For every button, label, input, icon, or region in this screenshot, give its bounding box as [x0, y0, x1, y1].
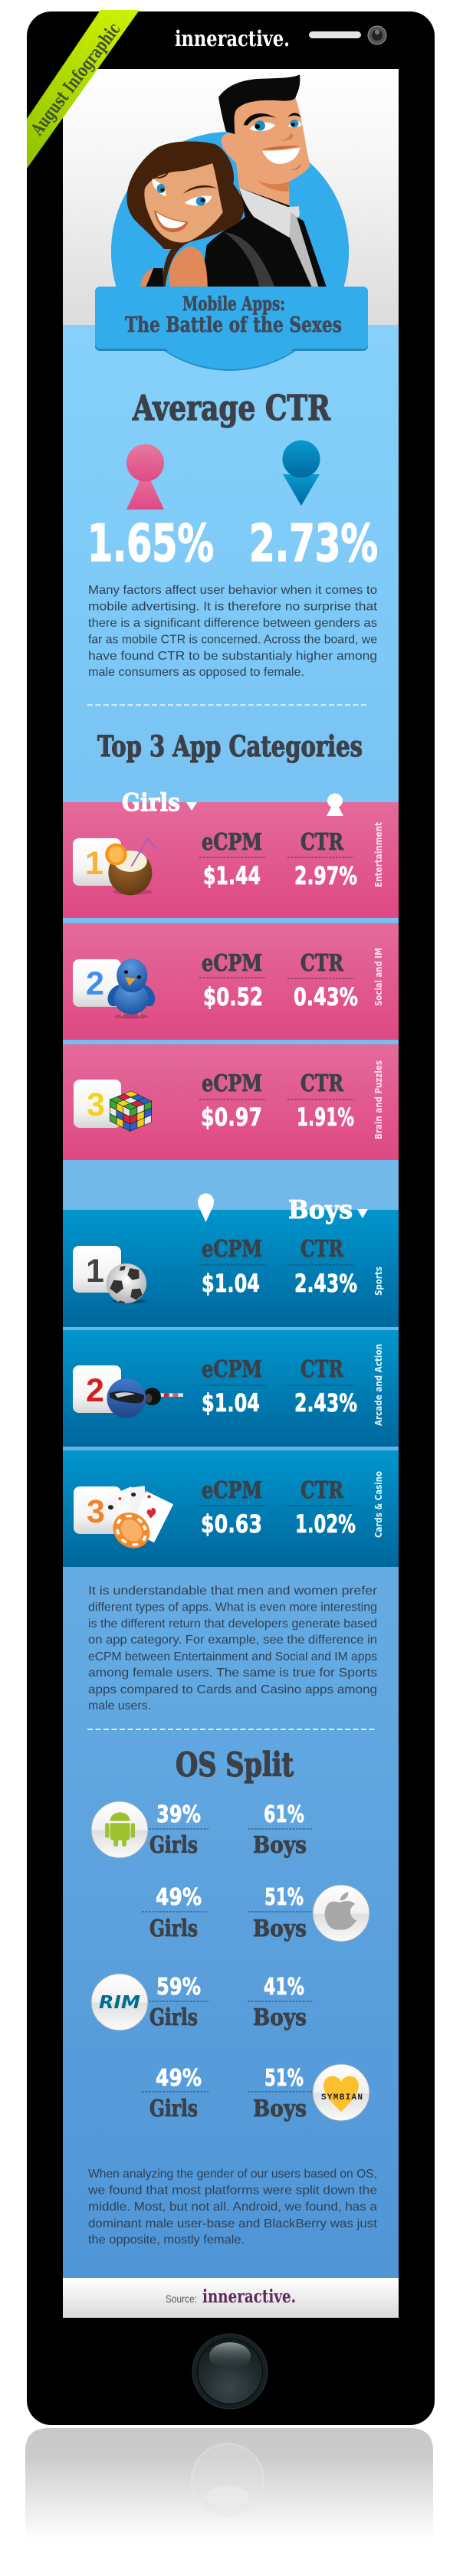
- paragraph: OS explanation: When analyzing the gender of our users based on OS,: [88, 2168, 377, 2181]
- column labels: eCPM: [202, 829, 262, 856]
- icon: puzzle cube: [110, 1091, 152, 1131]
- column labels: [202, 950, 344, 977]
- rank tile 3: 3: [87, 1086, 105, 1123]
- paragraph: app categories explanation: on app category. For example, see the difference in: [88, 1634, 377, 1647]
- icon: RIM badge: RIM: [99, 1993, 140, 2013]
- Apple stats: 49%: [156, 1884, 202, 1911]
- RIM stats: [142, 1974, 314, 2031]
- Apple stats: Girls: [149, 1916, 198, 1942]
- values: [202, 1388, 357, 1417]
- heading: Average CTR: Average CTR: [132, 388, 330, 428]
- banner title line 1: Mobile Apps:: [182, 293, 285, 315]
- heading: OS Split: OS Split: [176, 1746, 294, 1785]
- icon: racing helmet: [107, 1378, 183, 1418]
- RIM stats: 59%: [156, 1974, 201, 2001]
- column labels: [202, 1070, 344, 1097]
- icon: small male figure: [198, 1194, 214, 1222]
- rank tile 3: [74, 1080, 121, 1128]
- paragraph: app categories explanation: eCPM between Entertainment and Social and IM apps: [88, 1650, 377, 1663]
- paragraph: app categories explanation: different types of apps. What is even more interesting: [88, 1601, 377, 1614]
- phone speaker: [309, 31, 361, 38]
- footer: source: [63, 2278, 399, 2318]
- paragraph: CTR explanation: Many factors affect user behavior when it comes to: [88, 584, 377, 597]
- hero illustration: couple: [111, 74, 349, 371]
- paragraph: app categories explanation: [88, 1585, 378, 1712]
- Apple stats: Boys: [253, 1916, 307, 1942]
- icon: small female figure: [327, 794, 343, 816]
- Symbian stats: Girls: [149, 2096, 198, 2122]
- paragraph: CTR explanation: far as mobile CTR is concerned. Across the board, we: [88, 633, 377, 647]
- rank tile 2: [73, 1365, 121, 1413]
- rank tile 2: 2: [86, 965, 104, 1002]
- OS row: Apple: [142, 1884, 369, 1942]
- paragraph: app categories explanation: is the different return that developers generate based: [88, 1617, 377, 1630]
- RIM stats: Boys: [253, 2004, 307, 2031]
- banner title line 2: The Battle of the Sexes: [125, 313, 342, 337]
- panel: girls category 2: [63, 923, 399, 1040]
- column labels: CTR: [300, 950, 344, 977]
- column labels: [202, 1356, 344, 1383]
- panel: boys category 2: [63, 1330, 399, 1447]
- label: Girls: Girls: [122, 788, 180, 817]
- category label: Social and IM: [373, 948, 384, 1006]
- rank tile 3: [74, 1486, 121, 1534]
- category label: Cards & Casino: [373, 1471, 384, 1538]
- RIM stats: Girls: [149, 2004, 198, 2031]
- paragraph: CTR explanation: [88, 584, 378, 679]
- paragraph: OS explanation: [87, 2168, 378, 2247]
- icon: female figure: [126, 444, 164, 510]
- icon: playing cards and chip: [106, 1486, 173, 1553]
- Symbian stats: 51%: [264, 2065, 304, 2092]
- paragraph: CTR explanation: male consumers as opposed to female.: [88, 666, 304, 679]
- values: 0.43%: [294, 982, 358, 1011]
- icon: male figure: [282, 440, 320, 506]
- Android stats: Boys: [253, 1832, 307, 1859]
- column labels: CTR: [300, 1356, 344, 1383]
- phone home button: [192, 2334, 268, 2409]
- paragraph: OS explanation: dominant male user-base and BlackBerry was just: [88, 2217, 378, 2230]
- Symbian stats: 49%: [156, 2065, 202, 2092]
- values: 2.43%: [294, 1269, 357, 1298]
- paragraph: OS explanation: middle. Most, but not all. Android, we found, has a: [88, 2201, 377, 2214]
- stat: male CTR: 2.73%: [249, 513, 378, 573]
- phone reflection: [25, 2428, 433, 2540]
- values: $1.04: [202, 1388, 260, 1417]
- values: [202, 1269, 357, 1298]
- column labels: eCPM: [202, 1070, 262, 1097]
- RIM stats: 41%: [264, 1974, 304, 2001]
- OS row: RIM: [91, 1974, 314, 2031]
- column labels: [202, 829, 344, 856]
- rank tile 1: [73, 838, 121, 886]
- Android stats: 39%: [156, 1801, 201, 1828]
- paragraph: app categories explanation: It is understandable that men and women prefer: [88, 1585, 378, 1598]
- phone camera: [368, 26, 386, 44]
- column labels: CTR: [300, 829, 344, 856]
- title banner: [95, 287, 368, 368]
- values: 1.91%: [297, 1103, 354, 1132]
- paragraph: OS explanation: we found that most platforms were split down the: [87, 2184, 377, 2197]
- icon: Apple badge: [313, 1885, 369, 1942]
- paragraph: app categories explanation: male users.: [88, 1699, 151, 1712]
- values: [201, 1509, 356, 1539]
- Apple stats: [142, 1884, 314, 1942]
- OS row: Symbian: [142, 2064, 369, 2122]
- panel: girls category 1: [63, 802, 399, 918]
- column labels: eCPM: [202, 1236, 262, 1263]
- values: $0.97: [201, 1103, 262, 1132]
- panel: boys category 1: [63, 1210, 399, 1327]
- icon: blue bird: [108, 959, 155, 1019]
- rank tile 2: 2: [86, 1372, 104, 1409]
- Android stats: [142, 1801, 314, 1859]
- values: [203, 861, 357, 890]
- column labels: [202, 1236, 344, 1263]
- corner ribbon: [27, 10, 140, 169]
- screen header area: [63, 69, 399, 325]
- values: [201, 1103, 354, 1132]
- values: 2.97%: [294, 861, 357, 890]
- category label: Sports: [373, 1267, 384, 1296]
- phone brand logo: inneractive.: [175, 26, 290, 51]
- column labels: eCPM: [202, 1477, 262, 1504]
- values: $1.04: [202, 1269, 260, 1298]
- icon: Symbian badge: SYMBIAN: [321, 2093, 363, 2102]
- rank tile 1: 1: [86, 1253, 104, 1290]
- paragraph: OS explanation: the opposite, mostly female.: [88, 2234, 245, 2247]
- values: 2.43%: [294, 1388, 357, 1417]
- rank tile 2: [73, 959, 121, 1007]
- icon: soccer ball: [107, 1263, 148, 1303]
- column labels: eCPM: [202, 950, 262, 977]
- category label: Entertainment: [373, 822, 384, 887]
- column labels: [202, 1477, 344, 1504]
- panel: boys category 3: [63, 1450, 399, 1567]
- column labels: CTR: [300, 1236, 344, 1263]
- Symbian stats: [142, 2065, 314, 2122]
- column labels: eCPM: [202, 1356, 262, 1383]
- values: 1.02%: [295, 1509, 356, 1539]
- paragraph: CTR explanation: there is a significant difference between genders as: [88, 617, 377, 630]
- source logo: inneractive.: [202, 2286, 296, 2307]
- Symbian stats: Boys: [253, 2096, 307, 2122]
- category label: Arcade and Action: [373, 1344, 384, 1426]
- values: [203, 982, 358, 1011]
- values: $0.52: [203, 982, 263, 1011]
- category label: Brain and Puzzles: [373, 1060, 384, 1139]
- rank tile 1: [73, 1246, 121, 1293]
- label: Boys: Boys: [288, 1195, 353, 1224]
- rank tile 3: 3: [87, 1493, 105, 1530]
- paragraph: app categories explanation: apps compared to Cards and Casino apps among: [88, 1683, 377, 1696]
- column labels: CTR: [300, 1477, 344, 1504]
- panel: girls category 3: [63, 1044, 399, 1160]
- paragraph: app categories explanation: among female users. The same is true for Sports: [88, 1667, 377, 1680]
- screen content background: [63, 325, 399, 2278]
- OS row: Android: [91, 1801, 314, 1859]
- icon: Symbian badge: [313, 2064, 369, 2121]
- Apple stats: 51%: [264, 1884, 304, 1911]
- Android stats: 61%: [264, 1801, 304, 1828]
- values: $1.44: [203, 861, 261, 890]
- rank tile 1: 1: [85, 845, 103, 882]
- icon: Android badge: [91, 1801, 148, 1858]
- values: $0.63: [201, 1509, 262, 1539]
- stat: female CTR: 1.65%: [87, 513, 214, 573]
- paragraph: CTR explanation: mobile advertising. It is therefore no surprise that: [88, 601, 378, 613]
- heading: Top 3 App Categories: Top 3 App Categories: [97, 729, 363, 763]
- column labels: CTR: [300, 1070, 344, 1097]
- icon: coconut drink: [105, 839, 157, 895]
- Android stats: Girls: [149, 1832, 198, 1859]
- icon: RIM badge: [91, 1974, 148, 2030]
- source label: Source:: [166, 2293, 197, 2305]
- paragraph: CTR explanation: have found CTR to be substantialy higher among: [88, 650, 377, 663]
